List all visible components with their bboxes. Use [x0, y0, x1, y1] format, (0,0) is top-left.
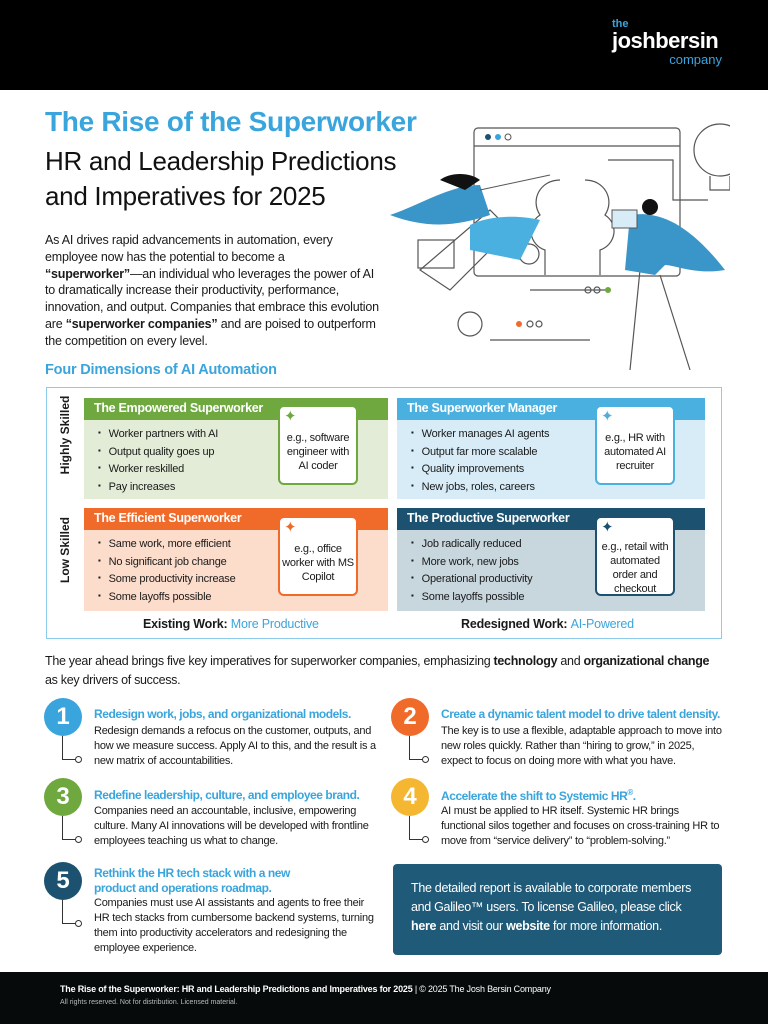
section heading: Four Dimensions of AI Automation — [45, 362, 277, 378]
quadrant: efficient: ✦ — [284, 519, 296, 536]
imperative 5: Companies must use AI assistants and agents to free their HR tech stacks from cumbersome backend systems, turning them into productivity accelerators and redesigning the employee experience. — [94, 897, 374, 954]
imperative 3: Companies need an accountable, inclusive, empowering culture. Many AI innovations will be developed with frontline employees teaching us what to change. — [94, 805, 369, 847]
example box: e.g., software engineer with AI coder — [287, 432, 349, 472]
imperative 2: The key is to use a flexible, adaptable approach to move into new roles quickly. Rather than “hiring to grow,” in 2025, expect to focus on doing more with what you have. — [441, 725, 722, 767]
footer — [0, 972, 768, 1024]
quadrant: manager: The Superworker Manager — [407, 401, 557, 415]
quadrant: empowered: Worker reskilled — [109, 463, 184, 475]
logo: the — [612, 18, 628, 30]
logo — [612, 18, 722, 67]
imperative 4: AI must be applied to HR itself. Systemic HR brings functional silos together and focuses on cross-training HR to move from “service delivery” to “problem-solving.” — [441, 805, 719, 847]
example box: ✦ — [284, 408, 296, 425]
quadrant: productive: More work, new jobs — [422, 556, 519, 568]
quadrant: manager: New jobs, roles, careers — [422, 481, 535, 493]
imperative 5: 5 — [56, 867, 70, 894]
imperative 3: 3 — [56, 783, 70, 810]
footer: All rights reserved. Not for distribution. Licensed material. — [60, 999, 237, 1006]
imperative 1: Redesign demands a refocus on the customer, outputs, and how we measure success. Apply AI to this, and the result is a new matrix of accountabilities. — [94, 725, 376, 767]
example box — [278, 405, 358, 485]
intro to imperatives: as key drivers of success. — [45, 673, 180, 687]
quadrant: productive: Job radically reduced — [422, 538, 521, 550]
quadrant: efficient: Some layoffs possible — [109, 591, 211, 603]
quadrant: empowered: Worker partners with AI — [109, 428, 218, 440]
quadrant: empowered: Pay increases — [109, 481, 175, 493]
quadrant: efficient — [84, 508, 388, 611]
quadrant: manager: Worker manages AI agents — [422, 428, 549, 440]
panel: four dimensions matrix — [46, 387, 722, 639]
imperative 2: Create a dynamic talent model to drive talent density. — [441, 707, 720, 721]
logo: joshbersin — [612, 28, 718, 53]
imperative 2: 2 — [403, 703, 417, 730]
axis label: redesigned work: Redesigned Work: AI-Powered — [461, 617, 634, 631]
intro to imperatives: The year ahead brings five key imperatives for superworker companies, emphasizing technology and organizational change — [45, 654, 709, 668]
imperative 4: 4 — [403, 783, 417, 810]
axis label: existing work: Existing Work: More Productive — [143, 617, 319, 631]
imperative 3 — [44, 778, 369, 847]
imperative 5 — [44, 862, 374, 954]
quadrant: empowered: Output quality goes up — [109, 446, 214, 458]
axis label: highly skilled: Highly Skilled — [58, 396, 72, 474]
quadrant: efficient: Some productivity increase — [109, 573, 236, 585]
imperative 5: Rethink the HR tech stack with a new — [94, 866, 290, 880]
quadrant: empowered — [84, 398, 388, 499]
imperative 1: 1 — [56, 703, 70, 730]
quadrant: efficient: No significant job change — [109, 556, 227, 568]
quadrant: productive: Operational productivity — [422, 573, 532, 585]
quadrant: efficient: e.g., office worker with MS Copilot — [282, 543, 354, 583]
quadrant: efficient: The Efficient Superworker — [94, 511, 241, 525]
imperative 4 — [391, 778, 719, 847]
quadrant: manager: ✦ — [601, 408, 613, 425]
subtitle — [45, 146, 396, 211]
subtitle: HR and Leadership Predictions — [45, 146, 396, 176]
imperative 1: Redesign work, jobs, and organizational models. — [94, 707, 351, 721]
quadrant: manager: e.g., HR with automated AI recruiter — [604, 432, 666, 472]
footer: The Rise of the Superworker: HR and Leadership Predictions and Imperatives for 2025 | © 2025 The Josh Bersin Company — [60, 984, 551, 994]
callout: report availability: The detailed report is available to corporate members and Galileo™ users. To license Galileo, please click here and visit our website for more information. — [411, 881, 691, 933]
subtitle: and Imperatives for 2025 — [45, 181, 325, 211]
quadrant: productive: ✦ — [601, 519, 613, 536]
illustration — [390, 123, 730, 370]
quadrant: productive: e.g., retail with automated order and checkout — [602, 541, 668, 595]
quadrant: productive — [397, 508, 705, 611]
imperative 2 — [391, 698, 722, 767]
imperative 3: Redefine leadership, culture, and employee brand. — [94, 788, 359, 802]
quadrant: manager: Output far more scalable — [422, 446, 537, 458]
intro to imperatives — [45, 654, 709, 687]
imperative 4: Accelerate the shift to Systemic HR®. — [441, 788, 636, 803]
axis label: low skilled: Low Skilled — [58, 517, 72, 583]
callout: report availability — [393, 864, 722, 955]
quadrant: productive: Some layoffs possible — [422, 591, 524, 603]
quadrant: manager: Quality improvements — [422, 463, 524, 475]
quadrant: empowered: The Empowered Superworker — [94, 401, 263, 415]
quadrant: efficient: Same work, more efficient — [109, 538, 231, 550]
logo: company — [669, 52, 722, 67]
imperative 1 — [44, 698, 376, 767]
quadrant: productive: The Productive Superworker — [407, 511, 569, 525]
title: The Rise of the Superworker — [45, 106, 417, 137]
intro paragraph: As AI drives rapid advancements in automation, every employee now has the potential to become a “superworker”—an individual who leverages the power of AI to dramatically increase their productivity, performance, innovation, and output. Companies that embrace this evolution are “superworker companies” and are poised to outperform the competition on every level. — [45, 233, 379, 348]
header bar — [0, 0, 768, 90]
imperative 5: product and operations roadmap. — [94, 881, 271, 895]
quadrant: manager — [397, 398, 705, 499]
